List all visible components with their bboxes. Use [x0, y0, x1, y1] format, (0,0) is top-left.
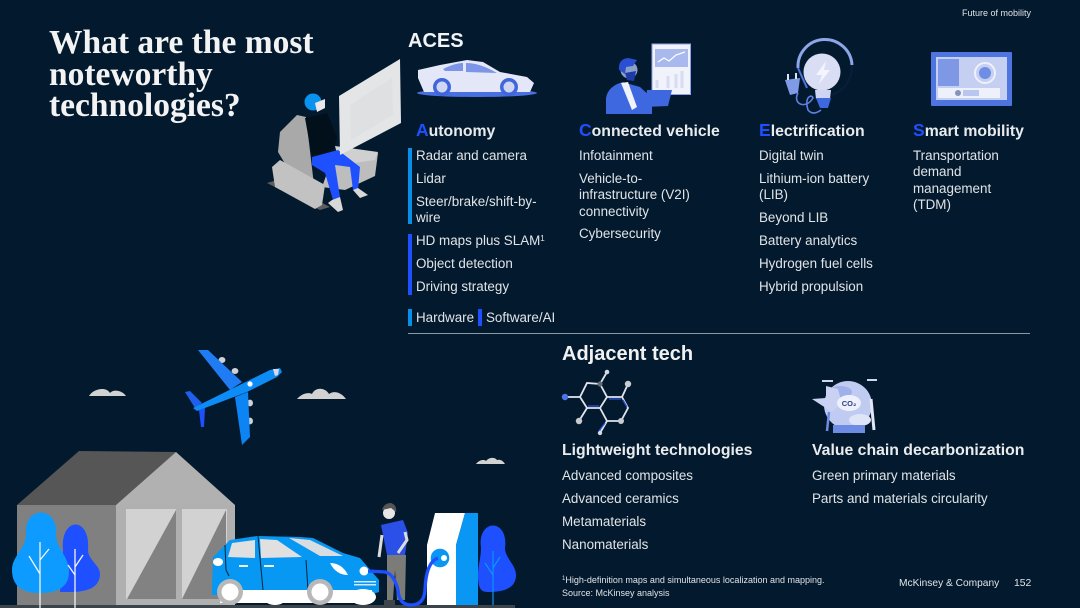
icon: globe with CO2 cloud: CO₂ — [842, 399, 856, 408]
icon: car — [417, 60, 537, 97]
title — [49, 24, 314, 124]
hardware bar — [408, 148, 412, 224]
Lightweight technologies heading: Lightweight technologies — [562, 442, 752, 459]
Connected vehicle list: Cybersecurity — [579, 226, 661, 241]
Value chain list: Green primary materials — [812, 468, 956, 483]
Lightweight list: Metamaterials — [562, 514, 646, 529]
Electrification list: Lithium-ion battery — [759, 171, 869, 186]
Electrification list — [759, 148, 873, 294]
Connected vehicle list: Infotainment — [579, 148, 653, 163]
Value chain heading: Value chain decarbonization — [812, 442, 1024, 459]
Electrification list: Beyond LIB — [759, 210, 828, 225]
electric car — [212, 536, 379, 605]
Autonomy list: wire — [416, 210, 441, 225]
clouds — [89, 389, 505, 464]
footer credit: McKinsey & Company — [899, 578, 999, 589]
title: technologies? — [49, 87, 241, 124]
person charging — [379, 503, 408, 605]
page number: 152 — [1014, 578, 1031, 589]
column: Autonomy: Autonomy — [416, 120, 495, 140]
column: Electrification: Electrification — [759, 120, 865, 140]
divider — [408, 332, 1030, 334]
Smart mobility list: management — [913, 181, 991, 196]
trees — [12, 512, 100, 608]
Autonomy list: Radar and camera — [416, 148, 527, 163]
Autonomy list: Driving strategy — [416, 279, 509, 294]
Autonomy list: HD maps plus SLAM1 — [416, 233, 545, 248]
Electrification list: Battery analytics — [759, 233, 857, 248]
column: Connected vehicle: Connected vehicle — [579, 120, 720, 140]
software bar — [408, 234, 412, 295]
Lightweight list: Advanced composites — [562, 468, 693, 483]
footnote: Source: McKinsey analysis — [562, 588, 670, 598]
icon: person in seat with screen — [267, 59, 401, 212]
plane — [185, 350, 282, 445]
Smart mobility list: (TDM) — [913, 197, 951, 212]
Smart mobility list — [913, 148, 999, 212]
Electrification list: Hybrid propulsion — [759, 279, 863, 294]
Lightweight list — [562, 468, 693, 552]
house — [17, 451, 235, 605]
footnote: 1High-definition maps and simultaneous localization and mapping. — [562, 575, 824, 585]
legend — [408, 309, 555, 326]
Lightweight list: Nanomaterials — [562, 537, 648, 552]
icon: molecule — [562, 370, 631, 435]
Electrification list: Hydrogen fuel cells — [759, 256, 873, 271]
Lightweight list: Advanced ceramics — [562, 491, 679, 506]
column: Smart mobility: Smart mobility — [913, 120, 1024, 140]
icon: light bulb with plug — [785, 39, 852, 113]
title: What are the most — [49, 24, 314, 61]
icon: presenter with chart — [606, 44, 690, 114]
ground — [0, 605, 515, 608]
Connected vehicle list: connectivity — [579, 204, 649, 219]
Connected vehicle list: Vehicle-to- — [579, 171, 642, 186]
Connected vehicle list — [579, 148, 690, 241]
right tree — [478, 526, 516, 605]
footnote — [562, 575, 824, 598]
Autonomy list: Steer/brake/shift-by- — [416, 194, 537, 209]
Autonomy list — [416, 148, 545, 294]
Smart mobility list: Transportation — [913, 148, 999, 163]
Value chain list — [812, 468, 988, 506]
header label: Future of mobility — [962, 8, 1031, 18]
icon: globe with CO2 cloud — [812, 380, 877, 433]
icon: dashboard screen — [931, 52, 1012, 106]
ACES heading: ACES — [408, 30, 464, 52]
title: noteworthy — [49, 56, 213, 92]
Smart mobility list: demand — [913, 164, 961, 179]
Autonomy list: Object detection — [416, 256, 513, 271]
Adjacent tech heading: Adjacent tech — [562, 343, 693, 365]
charging station — [368, 513, 478, 605]
Autonomy list: Lidar — [416, 171, 446, 186]
Connected vehicle list: infrastructure (V2I) — [579, 187, 690, 202]
legend: Software/AI — [486, 310, 555, 325]
legend: Hardware — [416, 310, 474, 325]
Electrification list: (LIB) — [759, 187, 788, 202]
Electrification list: Digital twin — [759, 148, 824, 163]
Value chain list: Parts and materials circularity — [812, 491, 988, 506]
